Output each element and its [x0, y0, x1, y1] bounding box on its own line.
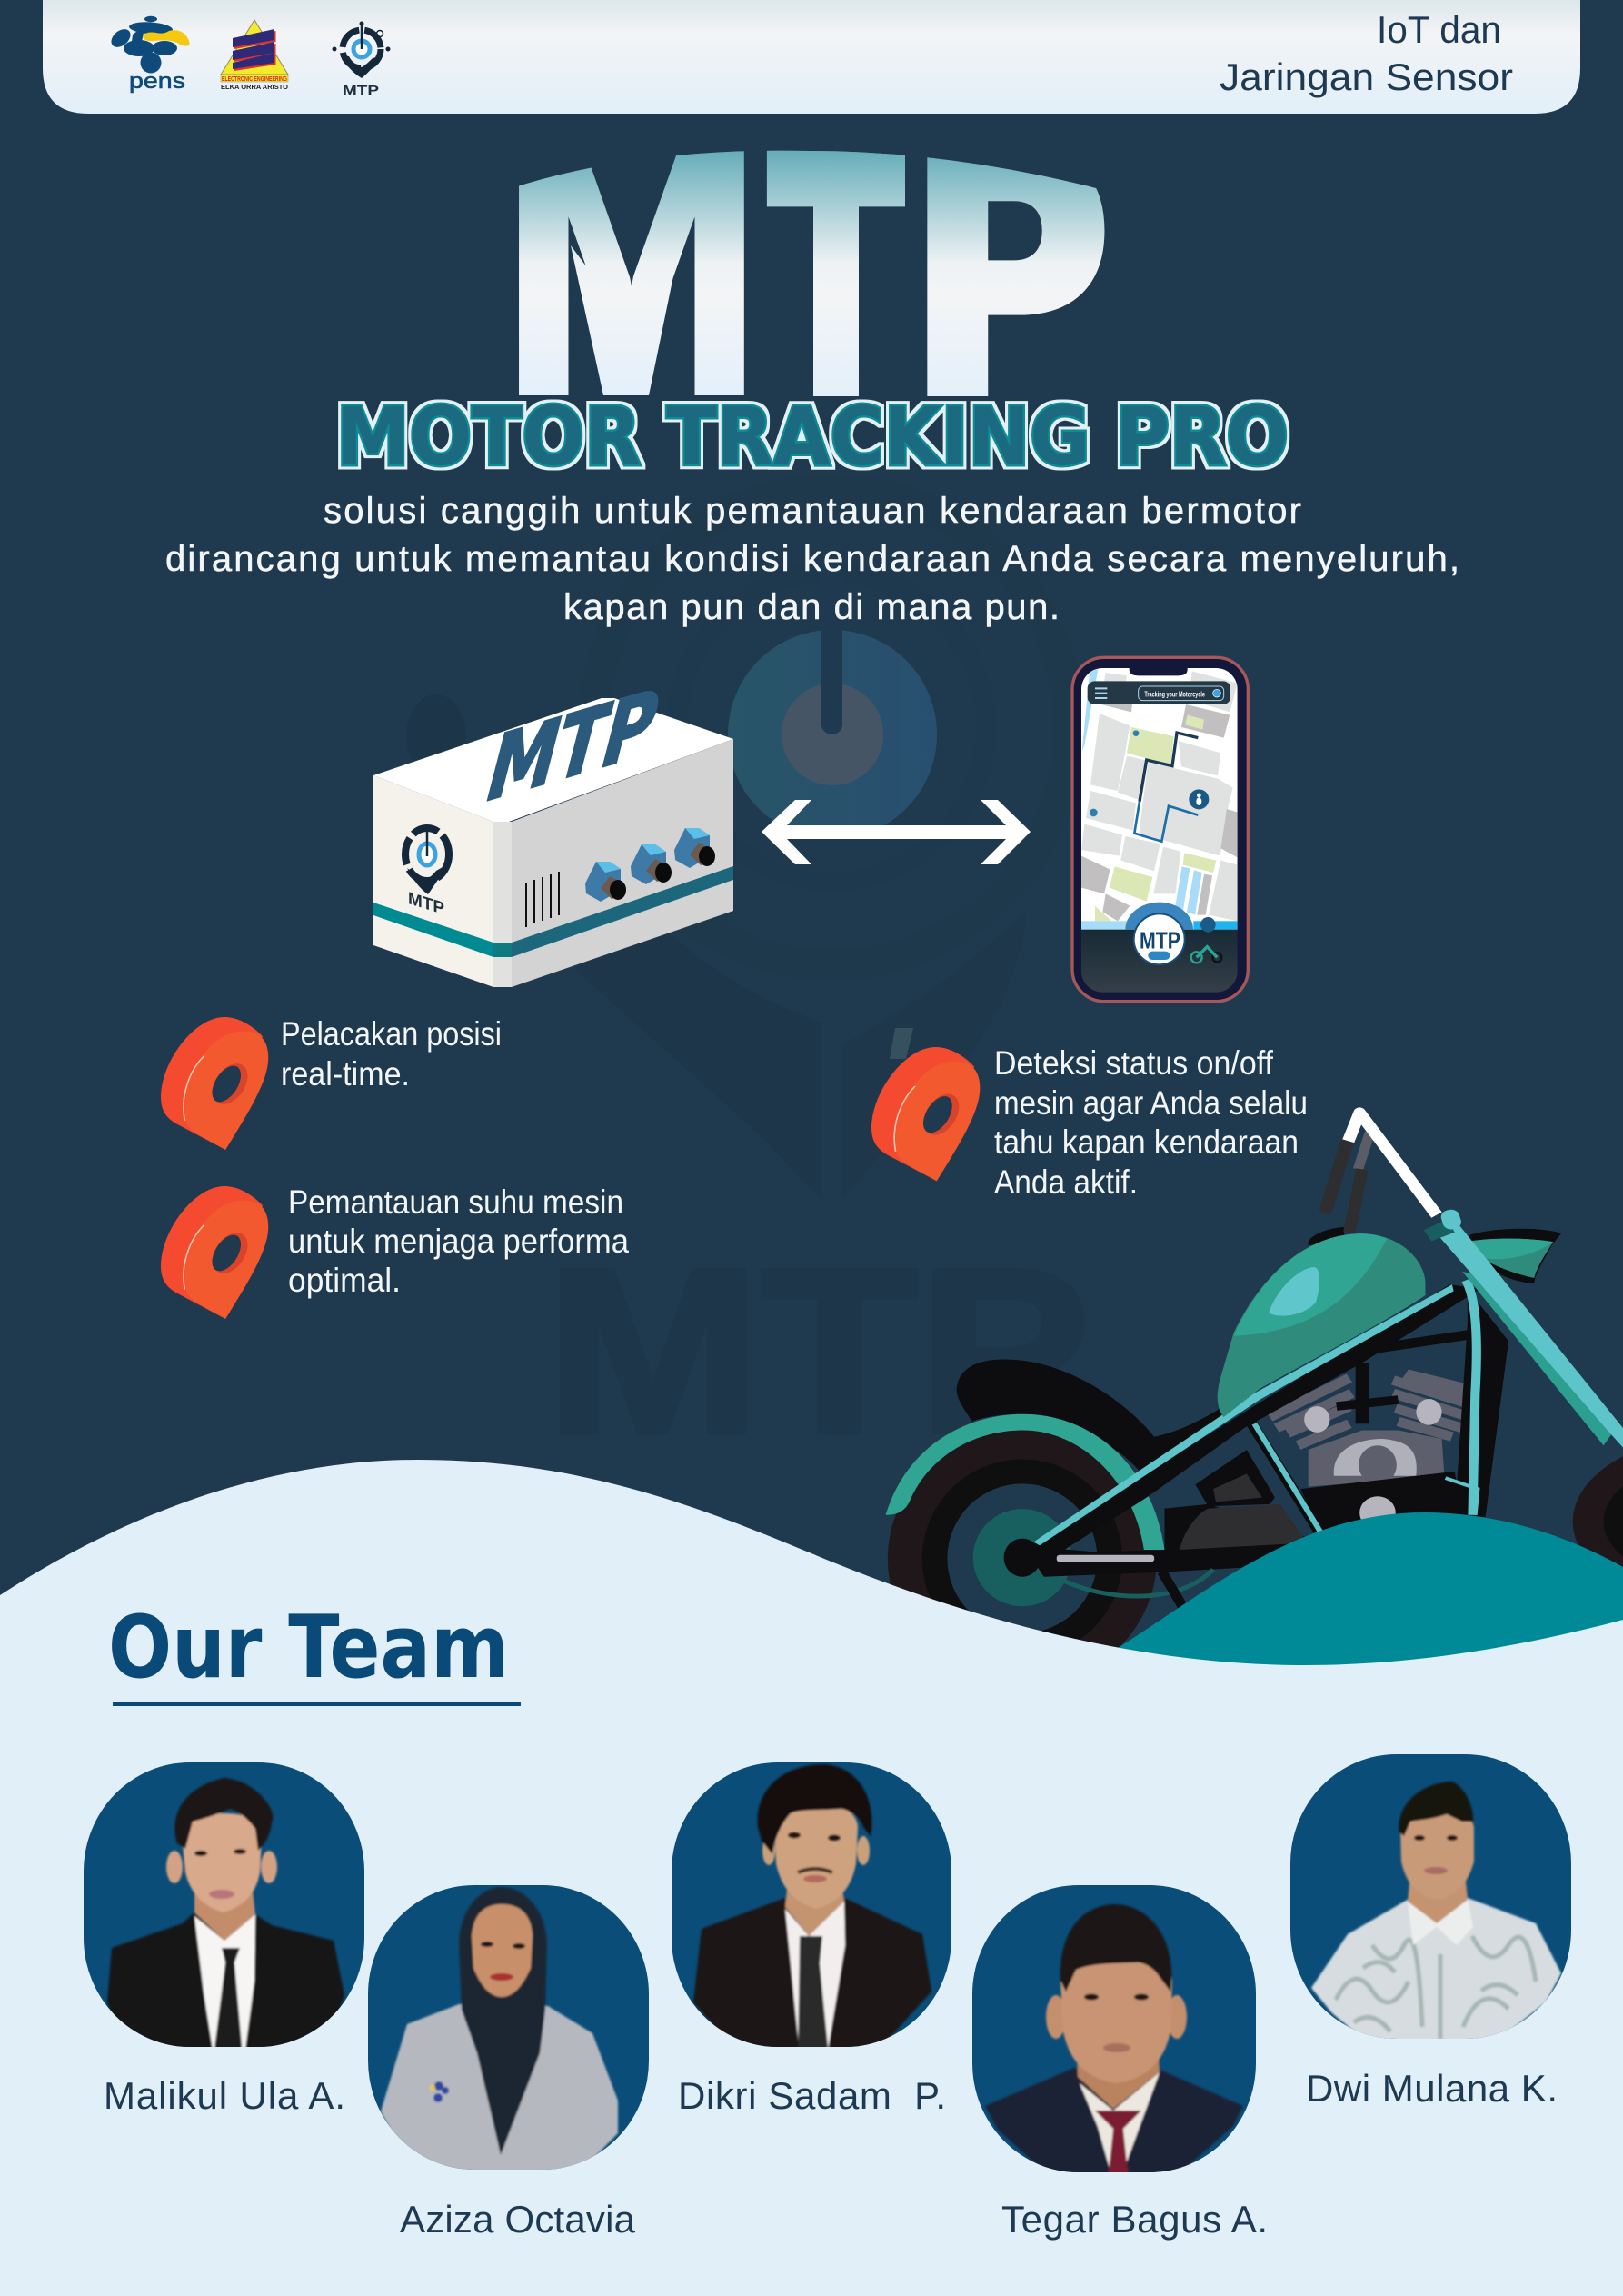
description text: [165, 491, 1459, 627]
feature text: Pemantauan suhu mesin: [288, 1183, 623, 1221]
fender: [886, 1414, 1164, 1550]
feature text: [994, 1044, 1308, 1201]
header bar: [43, 0, 1580, 114]
team member: Malikul Ula A.: [84, 1762, 364, 2117]
feature text: [288, 1183, 629, 1299]
title: Motor Tracking Pro: MOTOR TRACKING PRO: [336, 390, 1289, 484]
name: Malikul Ula A.: [104, 2074, 345, 2117]
description text: dirancang untuk memantau kondisi kendaraan Anda secara menyeluruh,: [165, 539, 1459, 579]
photo: [672, 1762, 951, 2056]
header topic text: [1220, 8, 1513, 98]
header topic text: Jaringan Sensor: [1220, 55, 1513, 98]
feature text: real-time.: [281, 1055, 410, 1093]
arrow: two-way link: [762, 800, 1031, 864]
feature text: tahu kapan kendaraan: [994, 1123, 1299, 1161]
front wheel: [1572, 1456, 1623, 1567]
seat: [957, 1360, 1229, 1473]
bottom panel: [1081, 903, 1238, 993]
photo: [84, 1762, 364, 2056]
feature text: mesin agar Anda selalu: [994, 1084, 1308, 1122]
rear frame: [1023, 1504, 1310, 1577]
feature text: [281, 1015, 502, 1093]
team section background wave: [0, 1460, 1623, 2296]
logo: Elka Orra Aristo: ELKA ORRA ARISTO: [221, 83, 288, 91]
description text: solusi canggih untuk pemantauan kendaraan bermotor: [324, 491, 1301, 531]
feature text: untuk menjaga performa: [288, 1223, 629, 1260]
team member: Tegar Bagus A.: [972, 1885, 1268, 2241]
logo: PENS: [108, 16, 189, 94]
feature text: optimal.: [288, 1262, 401, 1299]
feature text: Deteksi status on/off: [994, 1044, 1274, 1082]
device logo: [405, 825, 449, 919]
device knobs: [585, 828, 715, 902]
name: Tegar Bagus A.: [1001, 2198, 1268, 2241]
logo: MTP: MTP: [343, 83, 379, 98]
fuel tank: [1308, 1227, 1344, 1245]
photo: [368, 1885, 649, 2179]
phone mockup: [1072, 657, 1248, 1002]
title: MTP: M: [493, 85, 770, 475]
bottom panel: MTP: [1140, 926, 1180, 953]
title: MTP: T: [771, 85, 902, 475]
title: MTP: [519, 151, 1105, 396]
logo: PENS: pens: [129, 69, 185, 94]
photo: [1290, 1754, 1571, 2048]
feature: engine temperature: [161, 1183, 629, 1319]
map: [1081, 668, 1238, 932]
frame: [1033, 1284, 1480, 1562]
device box: [373, 668, 733, 987]
icon: location pin: [161, 1017, 268, 1150]
app bar: Tracking your Motorcycle: [1144, 689, 1205, 698]
name: Dwi Mulana K.: [1306, 2067, 1558, 2110]
name: Dikri Sadam P.: [678, 2074, 946, 2117]
feature: position tracking: [161, 1015, 502, 1150]
illustration: teal hill: [1118, 1512, 1623, 1682]
watermark logo: [406, 489, 1070, 1200]
logo: Elka Orra Aristo: ELECTRONIC ENGINEERING: [222, 76, 287, 83]
description text: kapan pun dan di mana pun.: [563, 587, 1060, 627]
name: Aziza Octavia: [400, 2198, 636, 2241]
feature text: Anda aktif.: [994, 1163, 1138, 1201]
rear wheel: [887, 1431, 1156, 1647]
engine: [1270, 1334, 1470, 1532]
team member: Aziza Octavia: [368, 1885, 649, 2241]
illustration: motorcycle: [886, 1113, 1623, 1687]
heading: Our Team: Our Team: [108, 1598, 509, 1698]
device top label: MTP: [476, 668, 670, 824]
logo: Elka Orra Aristo: [221, 20, 288, 91]
app bar: [1088, 681, 1230, 704]
watermark MTP text: MTP: [545, 1221, 1090, 1482]
feature text: Pelacakan posisi: [281, 1015, 502, 1053]
logo: MTP: [333, 22, 391, 98]
handlebar: [1326, 1143, 1347, 1208]
photo: [972, 1885, 1256, 2181]
fork and down tube: [1455, 1289, 1508, 1517]
headlight: [1466, 1229, 1561, 1283]
feature: engine on/off: [871, 1044, 1308, 1201]
team member: Dikri Sadam P.: [672, 1762, 951, 2117]
team member: Dwi Mulana K.: [1290, 1754, 1571, 2110]
device logo: MTP: [408, 888, 444, 919]
device vents: [526, 872, 559, 927]
header topic text: IoT dan: [1377, 8, 1501, 51]
icon: location pin: [161, 1186, 268, 1319]
icon: location pin: [871, 1047, 980, 1181]
title: MTP: P: [905, 85, 1112, 475]
